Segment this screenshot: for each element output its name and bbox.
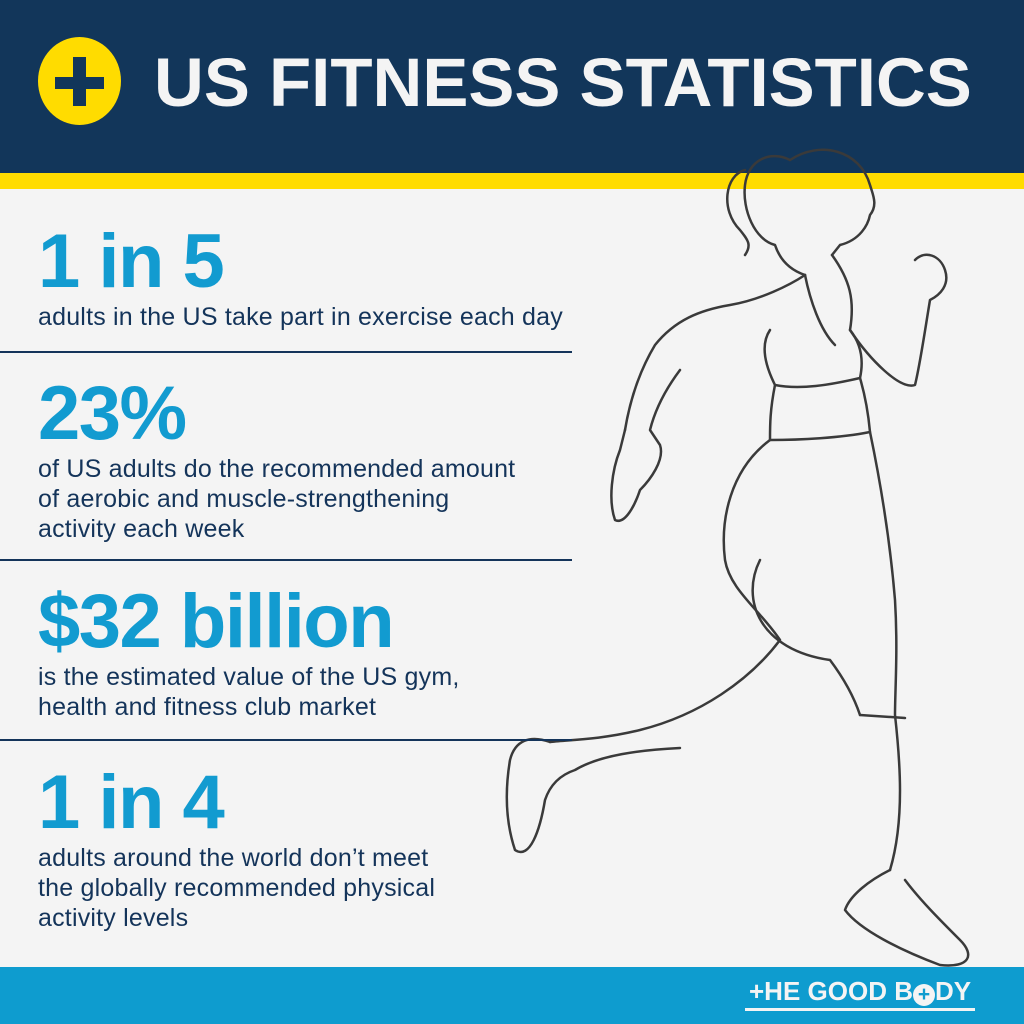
runner illustration	[506, 148, 970, 967]
stat: 1 in 4: 1 in 4	[38, 760, 223, 845]
stat: $32 billion: health and fitness club market	[38, 693, 376, 721]
footer bar	[0, 967, 1024, 1024]
stat: 23%	[38, 371, 515, 543]
stat: 23%: of aerobic and muscle-strengthening	[38, 485, 449, 513]
logo: the good body: +HE GOOD B DY	[749, 976, 971, 1006]
stat: 1 in 4	[38, 760, 435, 932]
stat: $32 billion: $32 billion	[38, 579, 393, 664]
stat: 1 in 5: adults in the US take part in exercise each day	[38, 303, 563, 331]
stat: 1 in 4: activity levels	[38, 904, 188, 932]
title: US FITNESS STATISTICS	[154, 44, 972, 121]
header banner	[0, 0, 1024, 173]
stat: 23%: of US adults do the recommended amount	[38, 455, 515, 483]
yellow stripe	[0, 173, 1024, 189]
stat: $32 billion	[38, 579, 460, 721]
stat: $32 billion: is the estimated value of the US gym,	[38, 663, 460, 691]
stat: 23%: 23%	[38, 371, 186, 456]
stat: 1 in 4: adults around the world don’t meet	[38, 844, 428, 872]
logo: the good body: +	[918, 983, 930, 1006]
icon: plus circle	[38, 37, 121, 125]
stat: 1 in 5: 1 in 5	[38, 219, 223, 304]
stat: 23%: activity each week	[38, 515, 244, 543]
stat: 1 in 5	[38, 219, 563, 331]
stat: 1 in 4: the globally recommended physical	[38, 874, 435, 902]
